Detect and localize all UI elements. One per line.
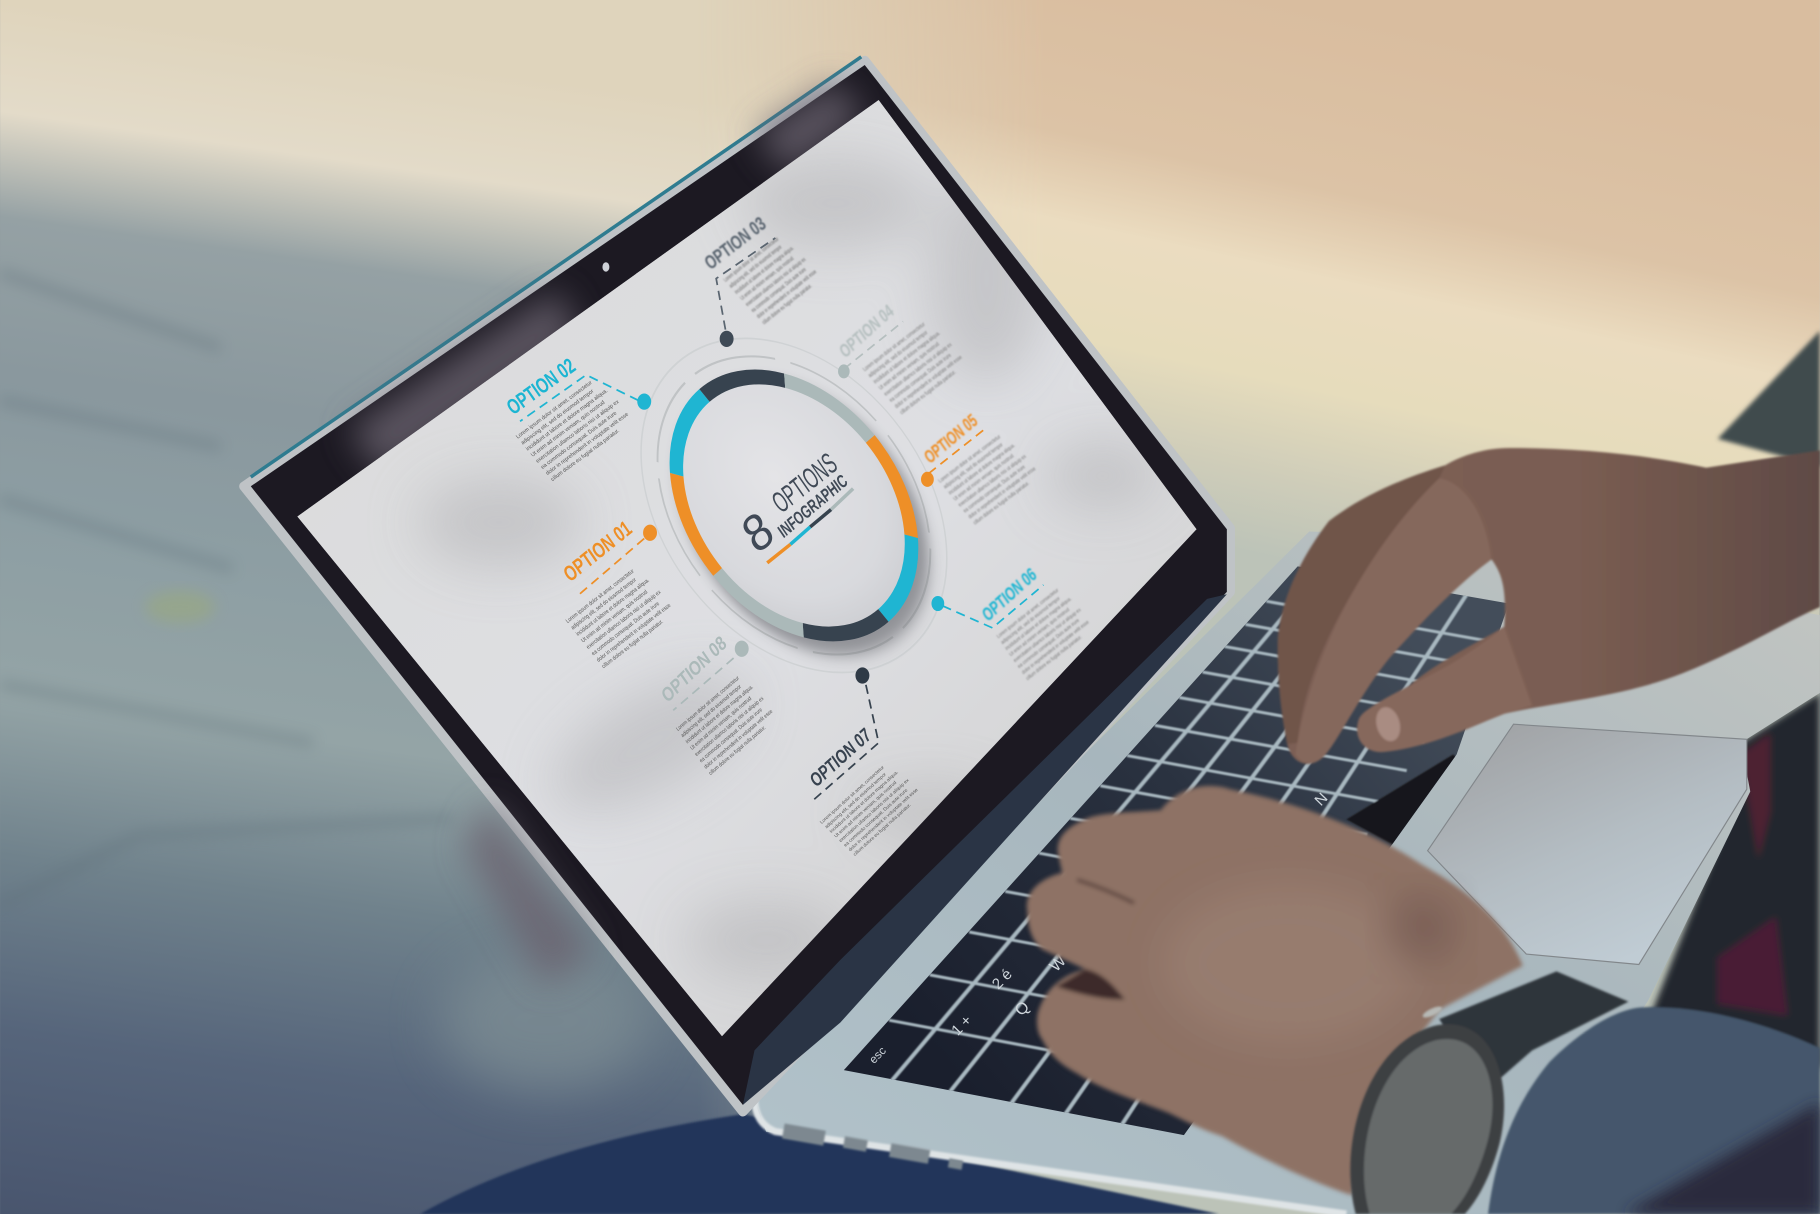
option 07: ea commodo consequat. Duis aute irure	[843, 788, 910, 848]
option 06: dolor in reprehenderit in voluptate velit esse	[1021, 619, 1091, 676]
option 04: adipiscing elit, sed do eiusmod tempor	[867, 330, 930, 379]
option 07: OPTION 07	[807, 724, 875, 792]
option 06: exercitation ullamco laboris nisi ut aliquip ex	[1012, 607, 1083, 664]
option 07: cillum dolore eu fugiat nulla pariatur.	[852, 802, 913, 857]
display: cloud reflections	[418, 157, 1161, 980]
option 03: exercitation ullamco laboris nisi ut aliquip ex	[744, 256, 808, 308]
ring segments	[670, 370, 918, 642]
option 04: incididunt ut labore et dolore magna aliqua.	[872, 330, 942, 385]
ring shadow	[672, 386, 938, 665]
option 02: cillum dolore eu fugiat nulla pariatur.	[550, 428, 621, 483]
option 06	[982, 567, 1089, 680]
option 04: dolor in reprehenderit in voluptate velit esse	[893, 354, 964, 410]
keyboard column gaps	[889, 601, 1486, 1082]
option 03: ea commodo consequat. Duis aute irure	[750, 266, 808, 314]
background: green leaf smudge	[145, 591, 215, 623]
option 02: ea commodo consequat. Duis aute irure	[540, 411, 618, 471]
option 08: cillum dolore eu fugiat nulla pariatur.	[708, 725, 767, 777]
option 07: incididunt ut labore et dolore magna aliqua.	[828, 770, 900, 835]
laptop front edge and ports	[754, 1097, 1346, 1214]
watch lug	[1421, 1004, 1443, 1020]
lid top edge highlight	[251, 57, 861, 477]
option 05: cillum dolore eu fugiat nulla pariatur.	[972, 480, 1031, 527]
option 05: dolor in reprehenderit in voluptate velit esse	[967, 466, 1038, 521]
option 02: OPTION 02	[502, 353, 580, 420]
inner dashed ring	[656, 356, 932, 656]
left hand: knuckle shadow	[1387, 894, 1457, 963]
option 02: dolor in reprehenderit in voluptate velit esse	[545, 412, 630, 477]
left hand: finger gaps	[1077, 880, 1134, 903]
key labels: 1 +	[948, 1012, 976, 1039]
option 08: exercitation ullamco laboris nisi ut aliquip ex	[694, 695, 765, 758]
option 08: dolor in reprehenderit in voluptate velit esse	[703, 708, 774, 771]
option 02	[507, 358, 628, 481]
background: dark wedge at right	[1718, 331, 1820, 467]
option 05: exercitation ullamco laboris nisi ut aliquip ex	[957, 453, 1028, 509]
connector dots	[637, 331, 944, 684]
option 07	[810, 727, 918, 856]
option 02: incididunt ut labore et dolore magna aliqua.	[525, 388, 610, 452]
option 08: ea commodo consequat. Duis aute irure	[699, 707, 764, 765]
option 04	[840, 304, 962, 414]
option 02: exercitation ullamco laboris nisi ut aliquip ex	[535, 399, 621, 465]
key labels: 2 é	[989, 966, 1016, 993]
option 05: ea commodo consequat. Duis aute irure	[962, 464, 1027, 515]
option 05	[924, 412, 1036, 525]
bezel reflections	[348, 81, 865, 987]
option 03: cillum dolore eu fugiat nulla pariatur.	[761, 283, 814, 326]
option 01: OPTION 01	[559, 516, 636, 587]
jeans	[420, 1114, 1219, 1214]
right hand: index finger highlight	[1295, 478, 1491, 763]
option 08: incididunt ut labore et dolore magna aliqua.	[685, 684, 755, 746]
option 06: ea commodo consequat. Duis aute irure	[1017, 617, 1081, 670]
option 02: adipiscing elit, sed do eiusmod tempor	[520, 388, 596, 446]
option 05: Ut enim ad minim veniam, quis nostrud	[952, 453, 1016, 503]
option 05: OPTION 05	[920, 409, 981, 467]
option 03	[704, 216, 817, 325]
camera	[602, 262, 609, 272]
option 07: exercitation ullamco laboris nisi ut aliquip ex	[838, 777, 911, 844]
option 08: Ut enim ad minim veniam, quis nostrud	[689, 695, 753, 752]
option 01: dolor in reprehenderit in voluptate velit esse	[596, 603, 672, 664]
laptop lid	[244, 57, 1230, 1112]
option 06: adipiscing elit, sed do eiusmod tempor	[1000, 595, 1062, 646]
option 08	[658, 632, 779, 777]
option 03: Ut enim ad minim veniam, quis nostrud	[739, 255, 796, 302]
key labels	[867, 790, 1331, 1066]
option 04: Ut enim ad minim veniam, quis nostrud	[878, 341, 941, 392]
option 06: Ut enim ad minim veniam, quis nostrud	[1008, 606, 1071, 658]
key labels: W	[1046, 951, 1070, 975]
watch strap	[1439, 971, 1628, 1091]
option 06: incididunt ut labore et dolore magna aliqua.	[1004, 596, 1073, 652]
option 06: OPTION 06	[978, 563, 1040, 625]
option 04: OPTION 04	[836, 299, 897, 362]
centre title: OPTIONS	[767, 447, 843, 520]
trackpad	[1428, 724, 1747, 964]
shirt: dark plaid	[1648, 693, 1820, 1068]
option 03: dolor in reprehenderit in voluptate velit esse	[755, 269, 819, 320]
lid chin band	[743, 594, 1227, 1105]
left hand	[1027, 786, 1523, 1195]
outer thin ring	[640, 338, 948, 674]
watch case	[1350, 1024, 1504, 1214]
right hand: middle finger shade	[1278, 465, 1445, 744]
laptop base: silver deck	[752, 532, 1820, 1214]
option 04: exercitation ullamco laboris nisi ut aliquip ex	[883, 342, 954, 398]
option 01: ea commodo consequat. Duis aute irure	[591, 601, 661, 657]
circular diagram	[640, 338, 948, 674]
option 05: adipiscing elit, sed do eiusmod tempor	[942, 442, 1005, 491]
option 03: incididunt ut labore et dolore magna aliqua.	[733, 245, 796, 296]
centre title	[744, 454, 847, 550]
watch face	[1364, 1039, 1493, 1214]
option 04: ea commodo consequat. Duis aute irure	[888, 352, 953, 404]
option 04: cillum dolore eu fugiat nulla pariatur.	[899, 369, 958, 416]
connector lines	[520, 238, 1043, 801]
right hand: thumb	[1357, 627, 1532, 752]
option 04: Lorem ipsum dolor sit amet, consectetur	[862, 321, 927, 373]
keyboard	[844, 566, 1509, 1135]
centre underline	[767, 489, 853, 563]
option 01: adipiscing elit, sed do eiusmod tempor	[570, 577, 638, 631]
option 06: cillum dolore eu fugiat nulla pariatur.	[1025, 634, 1083, 682]
background: lighter patch near laptop corner	[441, 952, 650, 1091]
option 01: Lorem ipsum dolor sit amet, consectetur	[565, 568, 636, 625]
option 01: cillum dolore eu fugiat nulla pariatur.	[601, 619, 665, 670]
key labels: esc	[867, 1044, 889, 1066]
option 07: Lorem ipsum dolor sit amet, consectetur	[819, 765, 886, 825]
option 07: dolor in reprehenderit in voluptate velit esse	[847, 787, 920, 853]
option 05: Lorem ipsum dolor sit amet, consectetur	[937, 434, 1003, 485]
option 07: adipiscing elit, sed do eiusmod tempor	[824, 772, 888, 830]
option 01	[564, 521, 670, 668]
option 07: Ut enim ad minim veniam, quis nostrud	[833, 780, 898, 839]
sleeve shadow	[1625, 1103, 1820, 1214]
option 08: adipiscing elit, sed do eiusmod tempor	[680, 684, 743, 739]
option 02: Lorem ipsum dolor sit amet, consectetur	[515, 380, 594, 440]
left hand: highlights	[1161, 882, 1416, 1045]
centre title: INFOGRAPHIC	[774, 470, 851, 542]
option 03: adipiscing elit, sed do eiusmod tempor	[728, 244, 784, 290]
option 01: Ut enim ad minim veniam, quis nostrud	[580, 589, 649, 644]
key labels: Q	[1011, 998, 1033, 1019]
centre disc	[682, 384, 906, 627]
background stripes	[0, 273, 453, 905]
display	[297, 100, 1197, 1036]
key labels: N	[1312, 790, 1331, 809]
option 03: Lorem ipsum dolor sit amet, consectetur	[722, 236, 781, 284]
option 01: exercitation ullamco laboris nisi ut aliquip ex	[585, 589, 663, 651]
watch	[1350, 971, 1628, 1214]
option 08: Lorem ipsum dolor sit amet, consectetur	[675, 675, 741, 733]
option 05: incididunt ut labore et dolore magna aliqua.	[947, 442, 1017, 497]
option 08: OPTION 08	[658, 632, 731, 707]
centre title: 8	[733, 501, 783, 564]
sleeve	[1488, 1007, 1820, 1214]
option 01: incididunt ut labore et dolore magna aliqua.	[575, 577, 651, 638]
keyboard row gaps	[888, 566, 1468, 1129]
option 03: OPTION 03	[701, 213, 770, 274]
lid bezel	[251, 65, 1227, 1105]
right hand: thumbnail	[1372, 704, 1404, 744]
right hand	[1278, 448, 1820, 764]
option 06: Lorem ipsum dolor sit amet, consectetur	[996, 587, 1060, 640]
option 02: Ut enim ad minim veniam, quis nostrud	[530, 400, 606, 459]
